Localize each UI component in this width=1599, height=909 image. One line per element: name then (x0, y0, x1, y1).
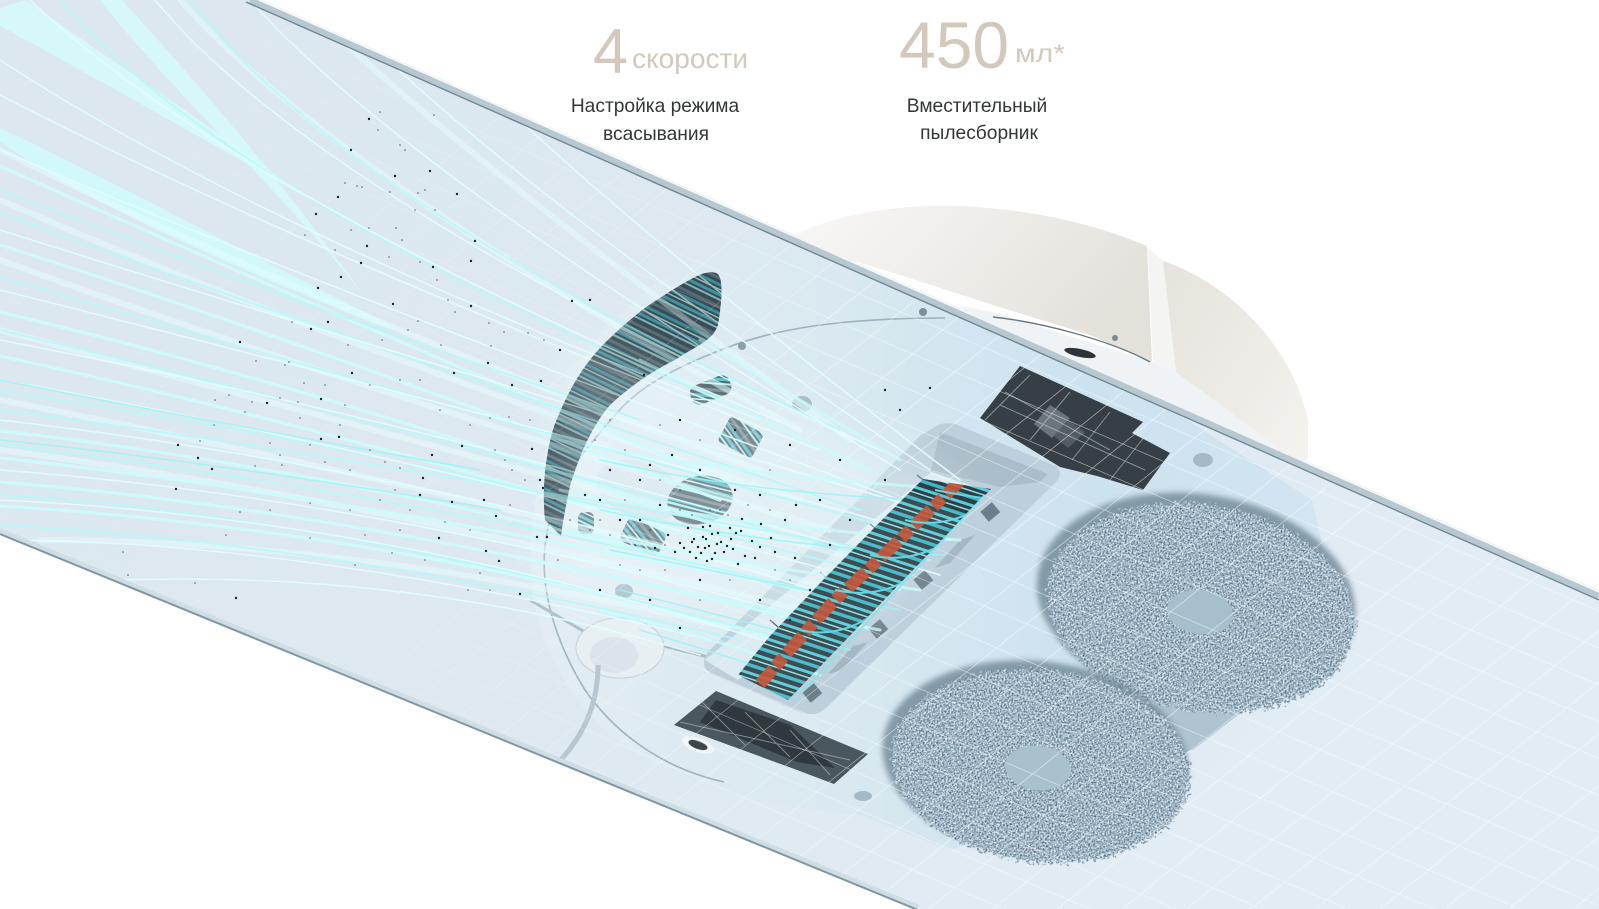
glass top edge (246, 0, 1599, 600)
mop pad upper (1034, 489, 1359, 716)
crescent shading over rays (544, 272, 722, 536)
robot upper shell behind the glass (785, 206, 1308, 490)
stat: suction speeds: всасывания (603, 124, 709, 145)
pale airflow glow over the robot (540, 330, 960, 620)
stat: dust container: 450 (899, 8, 1009, 82)
cyan airflow rays (0, 0, 980, 680)
stat: suction speeds: Настройка режима (571, 96, 739, 117)
upper dark compartment (980, 366, 1170, 490)
grid lines on the glass (426, 97, 1599, 909)
stat: dust container: мл* (1015, 40, 1065, 68)
lower dark compartment (674, 691, 868, 784)
mop pad lower (879, 656, 1195, 866)
stat: suction speeds: скорости (632, 43, 748, 74)
brush roller with bristles and airflow (738, 479, 991, 700)
side vents and wheel openings (578, 373, 764, 558)
brush compartment (704, 423, 1060, 714)
bristle pads on tray (802, 502, 1000, 703)
caster wheel and cable (530, 600, 720, 765)
dark suction slot crescent (544, 272, 722, 534)
recess between mop pads (1148, 700, 1239, 752)
stat: dust container: Вместительный (907, 96, 1047, 117)
glass bottom edge (0, 531, 918, 909)
stat: dust container: пылесборник (920, 123, 1038, 144)
stat: suction speeds: 4 (593, 17, 628, 87)
dust particles (123, 112, 930, 628)
stat: dust container (899, 8, 1065, 144)
robot body seen through the glass (543, 304, 1322, 850)
stat: suction speeds (571, 17, 748, 145)
